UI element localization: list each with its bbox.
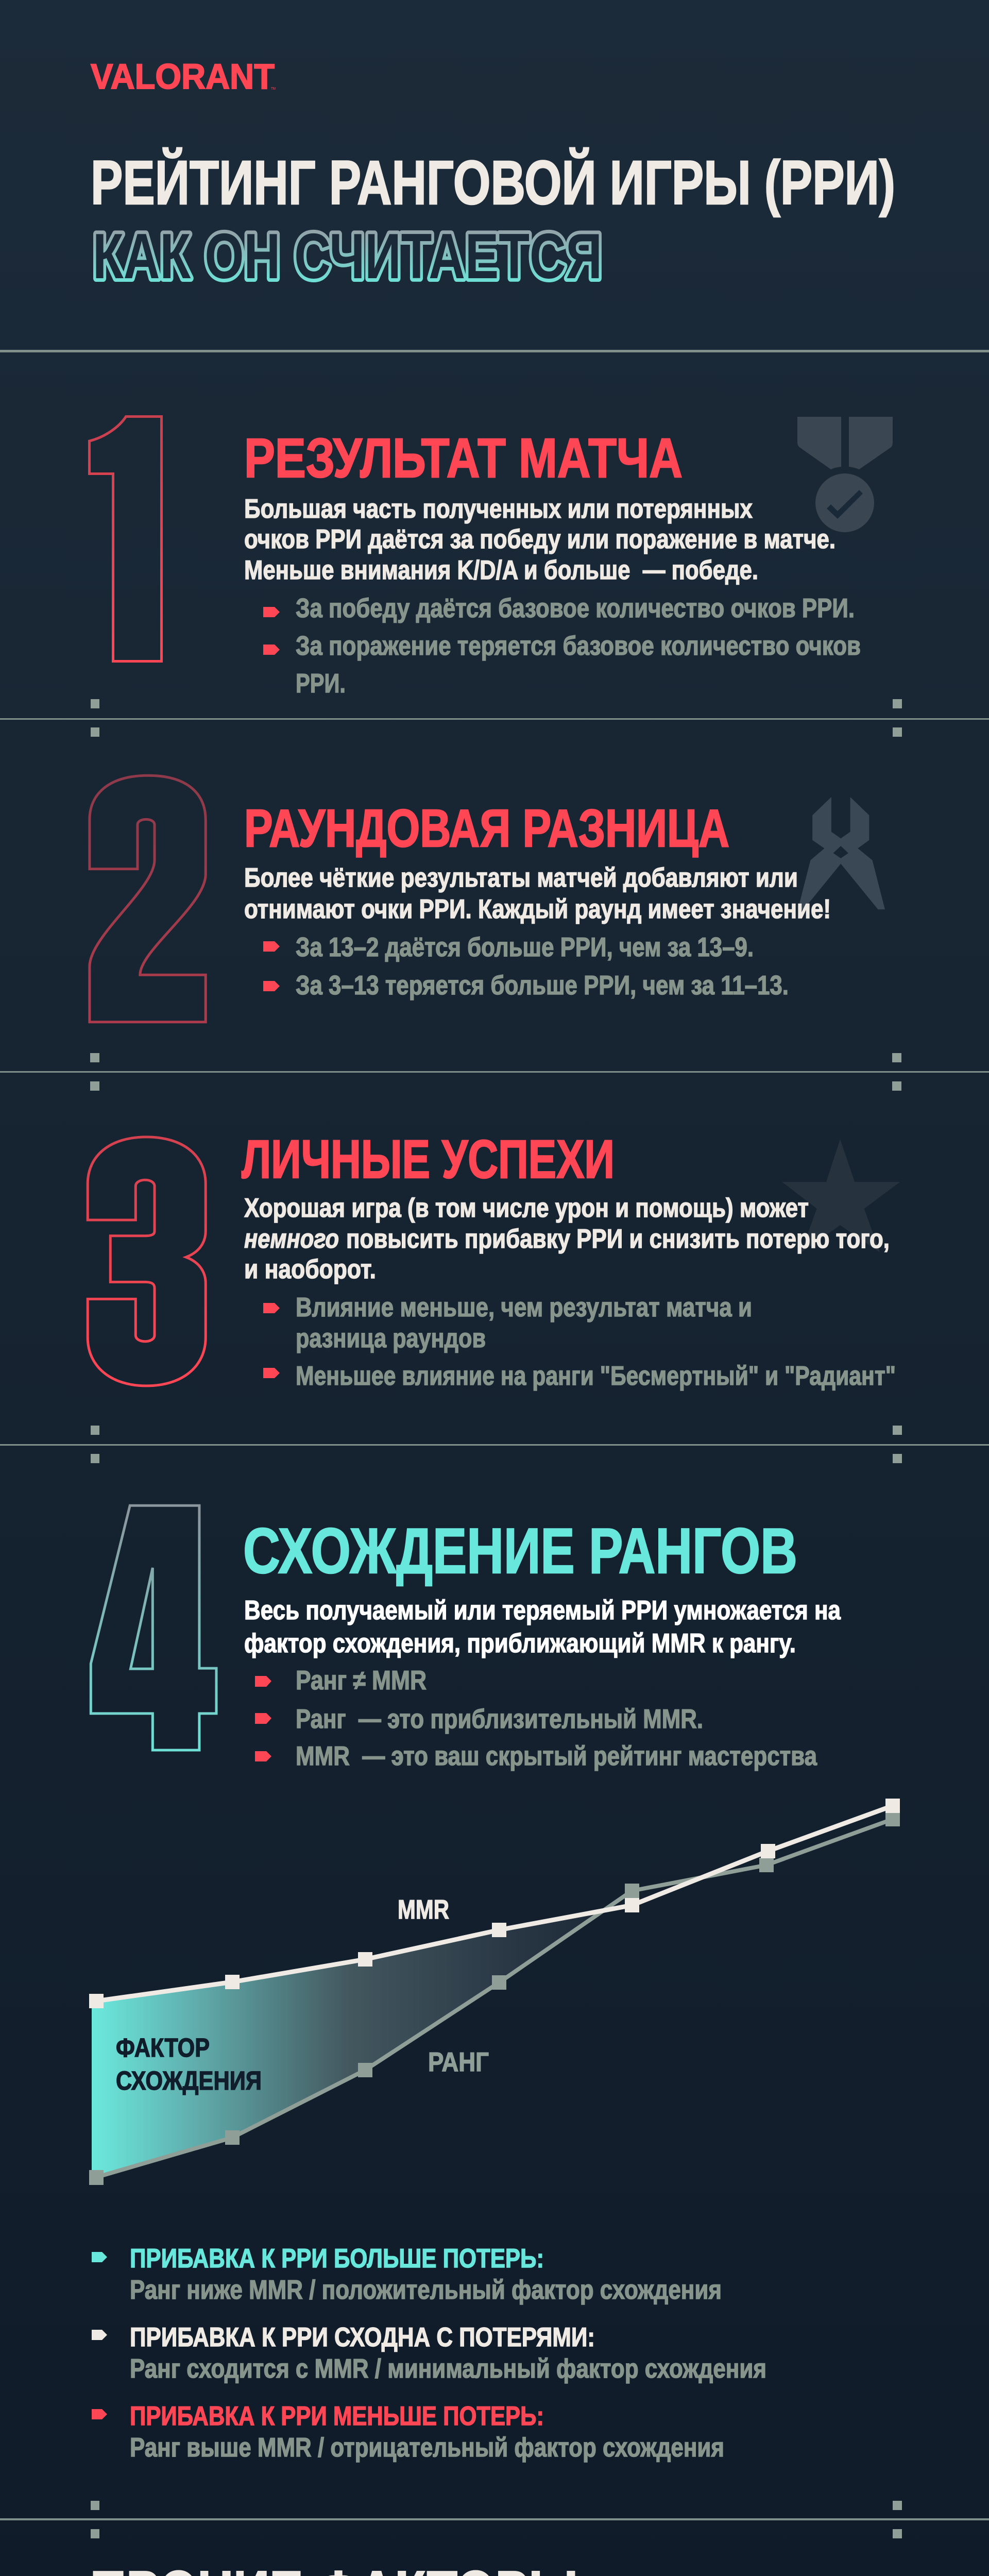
logo: VALORANT: VALORANT: [91, 57, 275, 96]
bullet list: РРИ.: [296, 669, 346, 699]
body text: [244, 1596, 841, 1658]
body text: немного: [244, 1224, 339, 1254]
label: convergence factor: ФАКТОР: [116, 2033, 210, 2062]
legend item: gain below loss: [92, 2401, 724, 2463]
label: rank: РАНГ: [428, 2047, 489, 2077]
legend item: gain below loss: ПРИБАВКА К РРИ МЕНЬШЕ ПОТЕРЬ:: [130, 2401, 544, 2431]
icon: pliers: [798, 797, 885, 909]
numeral 2 outline: [90, 775, 206, 1022]
bullet list: [263, 1293, 896, 1391]
body text: отнимают очки РРИ. Каждый раунд имеет значение!: [244, 894, 831, 924]
bullet list: За поражение теряется базовое количество очков: [296, 631, 861, 661]
bullet list: За 3–13 теряется больше РРИ, чем за 11–13.: [296, 971, 789, 1001]
legend item: gain above loss: ПРИБАВКА К РРИ БОЛЬШЕ ПОТЕРЬ:: [130, 2244, 544, 2274]
panel: 4 rank convergence: [89, 1505, 900, 2463]
body text: Весь получаемый или теряемый РРИ умножается на: [244, 1596, 841, 1625]
body text: очков РРИ даётся за победу или поражение в матче.: [244, 524, 835, 554]
body text: [244, 494, 835, 585]
logo: VALORANT: TM: [271, 87, 276, 91]
legend item: gain equals loss: Ранг сходится с MMR / минимальный фактор схождения: [130, 2354, 766, 2384]
rank line: [89, 1812, 900, 2185]
body text: [244, 863, 831, 924]
heading: ЛИЧНЫЕ УСПЕХИ: [242, 1129, 615, 1190]
body text: Меньше внимания K/D/A и больше — победе.: [244, 555, 758, 585]
numeral 3 outline: [88, 1137, 206, 1386]
body text: и наоборот.: [244, 1255, 376, 1284]
bullet list: [255, 1666, 817, 1771]
label: MMR: MMR: [398, 1895, 449, 1925]
line chart: MMR vs rank: [89, 1799, 900, 2185]
legend item: gain above loss: Ранг ниже MMR / положительный фактор схождения: [130, 2275, 722, 2305]
bullet list: [263, 594, 861, 699]
numeral 1 outline: [90, 416, 162, 662]
header panel: [91, 57, 895, 292]
bullet list: За победу даётся базовое количество очков РРИ.: [296, 594, 855, 623]
body text: фактор схождения, приближающий MMR к рангу.: [244, 1629, 796, 1658]
MMR line: [89, 1799, 900, 2008]
subtitle: outlined: КАК ОН СЧИТАЕТСЯ: [93, 221, 602, 292]
legend item: gain below loss: Ранг выше MMR / отрицательный фактор схождения: [130, 2433, 724, 2463]
label: convergence factor: СХОЖДЕНИЯ: [116, 2066, 262, 2095]
bullet list: MMR — это ваш скрытый рейтинг мастерства: [296, 1741, 817, 1771]
heading: РЕЗУЛЬТАТ МАТЧА: [244, 427, 683, 489]
label: convergence factor: [116, 2033, 262, 2095]
panel: 1 match result: [90, 416, 893, 699]
body text: [244, 1193, 890, 1284]
body text: Большая часть полученных или потерянных: [244, 494, 753, 524]
bullet list: [263, 933, 789, 1001]
heading: РАУНДОВАЯ РАЗНИЦА: [244, 799, 729, 858]
panel: 3 personal performance: [88, 1129, 900, 1391]
legend: [92, 2244, 766, 2463]
bullet list: Ранг — это приблизительный MMR.: [296, 1704, 703, 1734]
bullet list: Влияние меньше, чем результат матча и: [296, 1293, 752, 1323]
icon: medal: [797, 417, 893, 532]
numeral 4 outline: [91, 1505, 216, 1750]
legend item: gain above loss: [92, 2244, 722, 2305]
body text: повысить прибавку РРИ и снизить потерю того,: [346, 1224, 890, 1254]
legend item: gain equals loss: ПРИБАВКА К РРИ СХОДНА С ПОТЕРЯМИ:: [130, 2323, 595, 2352]
body text: Более чёткие результаты матчей добавляют или: [244, 863, 798, 893]
heading: СХОЖДЕНИЕ РАНГОВ: [243, 1516, 797, 1587]
bullet list: За 13–2 даётся больше РРИ, чем за 13–9.: [296, 933, 754, 962]
bullet list: Ранг ≠ MMR: [296, 1666, 427, 1696]
bullet list: разница раундов: [296, 1324, 486, 1353]
convergence area: [92, 1912, 602, 2178]
panel: 2 round difference: [90, 775, 885, 1022]
body text: Хорошая игра (в том числе урон и помощь) может: [244, 1193, 809, 1223]
legend item: gain equals loss: [92, 2323, 766, 2384]
icon: star: [782, 1139, 900, 1252]
